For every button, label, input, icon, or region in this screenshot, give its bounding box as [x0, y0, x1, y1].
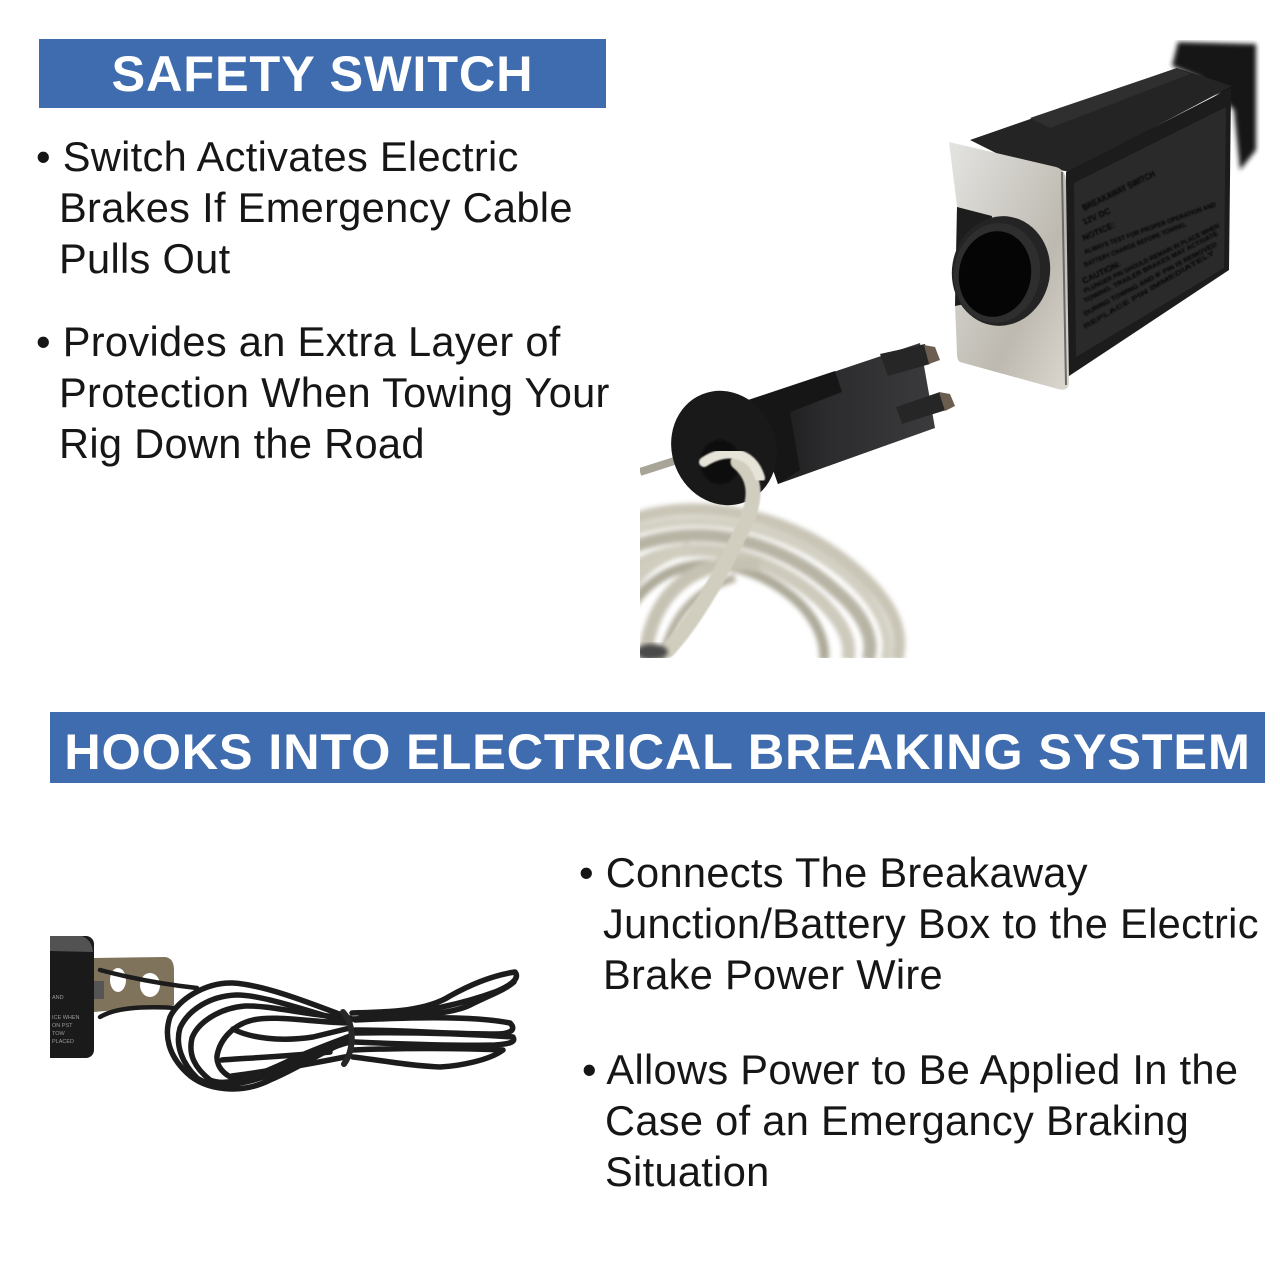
text block: safety switch bullets: Pulls Out [59, 235, 230, 282]
text block: electrical system bullets: Brake Power Wire [603, 951, 943, 998]
metal bracket [949, 142, 1069, 390]
photo: junction box with coiled black wire: TOW [52, 1031, 66, 1037]
pin prongs [880, 344, 930, 376]
banner: safety switch heading: SAFETY SWITCH [112, 45, 533, 102]
pin rubber flange [654, 375, 794, 521]
text block: safety switch bullets: Rig Down the Road [59, 420, 425, 467]
text block: electrical system bullets [579, 849, 1259, 1195]
coiled wire [100, 970, 516, 1089]
banner: safety switch heading [39, 39, 606, 108]
label text on box: CAUTION: [1080, 259, 1122, 286]
photo: breakaway switch and pin with cable [640, 40, 1260, 658]
right loop strands [352, 972, 516, 1018]
photo: junction box with coiled black wire [50, 936, 520, 1092]
label text on box: PLUNGER PIN SHOULD REMAIN IN PLACE WHEN [1083, 223, 1221, 295]
text block: electrical system bullets: • Connects The Breakaway [579, 849, 1088, 896]
side face of box [1066, 88, 1231, 378]
label text on box [1080, 169, 1221, 331]
photo: junction box with coiled black wire: AND [52, 995, 64, 1001]
text block: electrical system bullets: Situation [605, 1148, 770, 1195]
photo: junction box with coiled black wire: ICE WHEN [52, 1015, 80, 1021]
label text on box: BATTERY CHARGE BEFORE TOWING. [1083, 221, 1188, 269]
label text on box: NOTICE: [1081, 219, 1117, 243]
rear cables [1172, 42, 1256, 170]
cable through pin [668, 454, 760, 650]
text block: electrical system bullets: • Allows Power to Be Applied In the [582, 1046, 1238, 1093]
top face of box [970, 68, 1232, 172]
label text on box: 12V DC [1081, 206, 1112, 227]
junction box [40, 936, 94, 1058]
pull pin body [750, 343, 935, 484]
label text on box: TOWING. TRAILER BRAKES MAY ACTIVATE [1083, 230, 1220, 305]
text block: safety switch bullets: Brakes If Emergency Cable [59, 184, 573, 231]
label text on box: DURING TOWING AND IF PIN IS REMOVED [1083, 241, 1219, 318]
text block: electrical system bullets: Case of an Emergancy Braking [605, 1097, 1189, 1144]
text block: safety switch bullets: • Provides an Extra Layer of [36, 318, 561, 365]
photo: junction box with coiled black wire: PLACED [52, 1039, 74, 1045]
text block: safety switch bullets: • Switch Activates Electric [36, 133, 519, 180]
label text on box: ALWAYS TEST FOR PROPER OPERATION AND [1083, 201, 1218, 256]
left loop strands [167, 983, 350, 1089]
cable coil behind pin [630, 509, 899, 660]
label text on box: BREAKAWAY SWITCH [1080, 169, 1157, 213]
photo: junction box with coiled black wire: ON PST [52, 1023, 73, 1029]
label text on box: REPLACE PIN IMMEDIATELY [1082, 249, 1217, 331]
text block: electrical system bullets: Junction/Battery Box to the Electric [603, 900, 1259, 947]
banner: electrical system heading: HOOKS INTO ELECTRICAL BREAKING SYSTEM [64, 723, 1251, 780]
socket opening [955, 207, 992, 306]
text block: safety switch bullets [36, 133, 610, 467]
metal bracket [94, 957, 174, 1012]
text block: safety switch bullets: Protection When Towing Your [59, 369, 610, 416]
